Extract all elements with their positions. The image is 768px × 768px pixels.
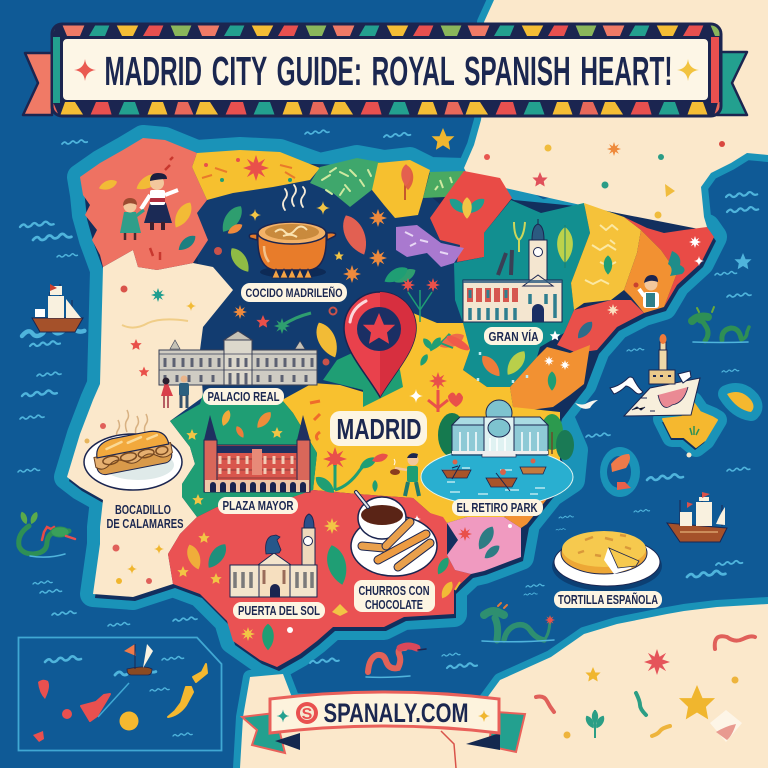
label: churros bbox=[354, 580, 435, 612]
asturias bbox=[192, 150, 320, 200]
label: palacio real bbox=[203, 388, 284, 405]
person northeast bbox=[634, 275, 659, 308]
rowing boats bbox=[442, 458, 546, 491]
label: tortilla bbox=[554, 591, 662, 608]
cocido pot bbox=[249, 185, 336, 278]
doodles northwest bbox=[98, 155, 418, 376]
catalonia yellow bbox=[571, 203, 641, 310]
small bird bbox=[575, 400, 598, 409]
label: puerta del sol bbox=[233, 602, 325, 619]
ship left bbox=[32, 284, 83, 332]
label: madrid: MADRID bbox=[336, 414, 422, 446]
label: palacio real: PALACIO REAL bbox=[208, 390, 280, 404]
green patch bbox=[423, 171, 464, 198]
palacio real bbox=[159, 331, 317, 385]
label: cocido bbox=[241, 283, 347, 302]
basque yellow bbox=[372, 160, 430, 218]
label: churros: CHOCOLATE bbox=[365, 598, 423, 612]
plaza mayor green bbox=[170, 394, 317, 517]
tarragona red bbox=[557, 300, 644, 353]
base navy region: castilla bbox=[170, 160, 470, 430]
puerta del sol bbox=[230, 514, 317, 597]
label: bocadillo: BOCADILLO bbox=[115, 502, 171, 517]
rioja purple bbox=[396, 225, 464, 267]
label: gran via: GRAN VÍA bbox=[488, 329, 539, 344]
canary island: hierro bbox=[33, 731, 44, 742]
label: churros: CHURROS CON bbox=[358, 584, 430, 598]
doodles centre bbox=[310, 330, 471, 497]
palace couple bbox=[161, 376, 189, 408]
doodles lower centre bbox=[312, 447, 389, 497]
coast shadow bbox=[69, 142, 716, 671]
catalonia red bbox=[624, 217, 714, 307]
label: cocido: COCIDO MADRILEÑO bbox=[246, 285, 342, 300]
label: tortilla: TORTILLA ESPAÑOLA bbox=[558, 592, 658, 607]
doodles northeast bbox=[382, 164, 704, 341]
confetti on africa bbox=[536, 636, 755, 742]
el retiro park bbox=[421, 400, 574, 506]
doodles on red bbox=[177, 515, 512, 650]
chef figure bbox=[390, 453, 419, 496]
sea star right bbox=[734, 253, 752, 269]
andalusia red bbox=[168, 490, 471, 667]
tortilla bbox=[552, 531, 662, 591]
sea dragon coral bbox=[366, 646, 426, 677]
gran via building bbox=[463, 219, 562, 322]
label: puerta del sol: PUERTA DEL SOL bbox=[238, 604, 320, 618]
footer ribbon spanaly bbox=[242, 692, 525, 753]
girl bbox=[120, 198, 144, 240]
sea dragon east bbox=[692, 307, 749, 342]
man bbox=[141, 173, 178, 230]
aragon teal bbox=[454, 200, 590, 387]
ship right bbox=[667, 492, 727, 542]
canary island: la palma bbox=[38, 680, 49, 699]
sea waves bbox=[18, 130, 758, 668]
portugal dots bbox=[112, 544, 164, 584]
label: bocadillo: DE CALAMARES bbox=[106, 516, 184, 531]
confetti on france bbox=[484, 141, 725, 218]
catalonia orange bbox=[624, 230, 677, 313]
border line bbox=[441, 731, 456, 768]
plaza mayor bbox=[204, 415, 310, 492]
green wedge bbox=[323, 340, 403, 407]
land: france and north bbox=[464, 0, 768, 232]
label: bocadillo bbox=[106, 502, 184, 531]
valencia orange bbox=[510, 345, 590, 410]
france land halo bbox=[240, 0, 768, 768]
murcia pink bbox=[447, 517, 521, 574]
label: gran via bbox=[484, 327, 543, 345]
cantabria bbox=[310, 158, 384, 207]
sea dragon left bbox=[19, 511, 75, 557]
canary island: tenerife bbox=[81, 694, 110, 721]
teal doodles bbox=[478, 330, 570, 391]
canary island: fuerteventura bbox=[168, 687, 193, 717]
bocadillo sandwich bbox=[84, 410, 182, 490]
label: plaza mayor bbox=[218, 497, 298, 514]
orange southeast bbox=[504, 477, 569, 528]
churros plate bbox=[351, 492, 437, 576]
inset wave marks bbox=[45, 656, 192, 736]
label: retiro: EL RETIRO PARK bbox=[456, 501, 538, 515]
label: madrid bbox=[330, 411, 427, 446]
inset canary islands bbox=[18, 638, 222, 750]
canary island: lanzarote bbox=[193, 664, 207, 682]
sea star bbox=[432, 128, 454, 150]
label: retiro bbox=[452, 499, 543, 516]
iberia coast halo bbox=[67, 138, 714, 667]
canary island: gran canaria bbox=[120, 712, 138, 730]
navarra red bbox=[430, 171, 512, 262]
people in galicia bbox=[120, 173, 178, 240]
footer ribbon spanaly: SPANALY.COM bbox=[324, 698, 468, 728]
balearic islands bbox=[600, 392, 754, 497]
canary island: gomera bbox=[62, 709, 72, 719]
sea dragon south bbox=[482, 603, 555, 642]
madrid yellow bbox=[282, 313, 560, 523]
galicia bbox=[80, 138, 208, 270]
title banner bbox=[23, 24, 747, 116]
inset boat bbox=[124, 644, 153, 675]
retiro lake bbox=[421, 448, 573, 506]
land: north africa bbox=[240, 604, 768, 768]
portugal bbox=[67, 250, 233, 597]
castle map fragment bbox=[610, 334, 700, 416]
doodles on plaza green bbox=[186, 409, 283, 505]
madrid pin bbox=[344, 292, 416, 397]
label: plaza mayor: PLAZA MAYOR bbox=[222, 499, 294, 513]
map of iberia bbox=[67, 138, 716, 671]
footer ribbon spanaly: S bbox=[302, 706, 313, 723]
